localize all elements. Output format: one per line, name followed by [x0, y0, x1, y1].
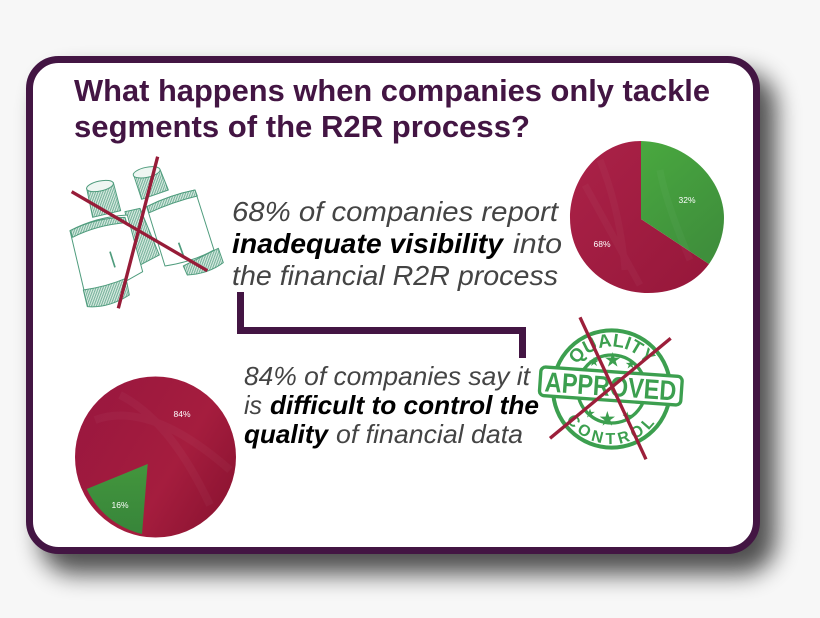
stamp ring text: CONTROL — [568, 415, 654, 444]
text block: visibility statistic — [232, 196, 562, 291]
stamp stars: ★ — [588, 355, 600, 369]
text block: quality statistic: of financial data — [336, 419, 523, 449]
text block: visibility statistic: 68% of companies report — [232, 196, 559, 227]
text block: quality statistic: quality — [244, 419, 330, 449]
card shadow — [40, 72, 776, 574]
heading — [74, 73, 710, 144]
pie chart: 68% and 32% — [570, 141, 724, 293]
red cross over stamp — [550, 317, 671, 459]
text block: quality statistic — [244, 361, 539, 449]
text block: quality statistic: is — [244, 390, 262, 420]
text block: quality statistic: difficult to control the — [270, 390, 539, 420]
pie chart: 68% and 32%: 32% — [678, 195, 696, 205]
text block: visibility statistic: inadequate visibility — [232, 228, 504, 259]
stamp ring text: QUALITY — [570, 334, 656, 362]
panel: main card — [26, 56, 760, 554]
pie chart: 84% and 16% — [75, 376, 236, 538]
text block: visibility statistic: into — [513, 228, 562, 259]
stamp stars: ★ — [598, 408, 616, 430]
icon: crossed-out binoculars — [70, 157, 223, 308]
text block: quality statistic: 84% of companies say it — [244, 361, 532, 391]
icon: crossed-out approved stamp — [538, 316, 684, 460]
stamp ring text — [568, 334, 656, 444]
heading: segments of the R2R process? — [74, 109, 530, 144]
pie chart: 84% and 16%: 84% — [173, 409, 191, 419]
red cross over binoculars — [72, 157, 207, 308]
stamp stars: ★ — [584, 407, 596, 421]
stamp stars: ★ — [625, 357, 636, 371]
stamp banner: APPROVED — [544, 366, 677, 407]
pie chart: 84% and 16%: 16% — [111, 500, 129, 510]
pie chart: 68% and 32%: 68% — [593, 239, 611, 249]
stamp stars: ★ — [622, 409, 633, 423]
stamp stars — [584, 350, 636, 430]
heading: What happens when companies only tackle — [74, 73, 710, 108]
stamp stars: ★ — [604, 350, 622, 372]
text block: visibility statistic: the financial R2R process — [232, 260, 558, 291]
arrow: connector between statistics — [240, 292, 522, 358]
